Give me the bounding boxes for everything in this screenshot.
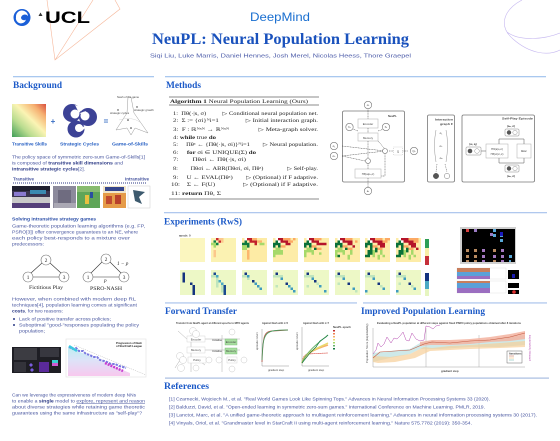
subheading: solving intransitive strategy games: Solving intransitive strategy games: [12, 216, 96, 222]
algorithm box: Algorithm 1 Neural Population Learning (Ours): [170, 98, 308, 105]
diagram: fictitious play: 1: [27, 275, 30, 281]
plus sign: +: [51, 117, 56, 126]
diagram: transfer from NeuPL agent: Memory: [191, 348, 202, 352]
diagram: transfer from NeuPL agent: [175, 321, 249, 372]
image: small game frames: [508, 270, 519, 294]
algorithm box: 5: Πθᶻ ← {Πθ(·|s, σi)}ᴺi=1 ▷ Neural population.: [173, 141, 318, 148]
diagram: self-play episode: Self-Play Episode: [502, 116, 534, 120]
heat maps: interaction graph row: [180, 270, 421, 295]
algorithm box: 6: for σi ∈ UNIQUE(Σ) do: [173, 149, 257, 156]
diagram: interaction graph: [428, 115, 454, 182]
diagram: self-play episode: Πθ(a|o,σ): [491, 147, 503, 151]
text: research question: guarantees using the same infrastructure as "self-play"?: [12, 410, 142, 416]
diagram: PSRO-Nash: [83, 254, 129, 292]
chart: against Nash with n=5: [255, 321, 289, 372]
heading: background: Background: [13, 81, 63, 91]
algorithm box: 4: while true do: [173, 135, 217, 141]
legend: NeuPL epoch: NeuPL epoch: [333, 325, 351, 329]
bullet list: reasons: [13, 316, 140, 334]
diagram: transfer from NeuPL agent: Encoder: [191, 338, 201, 342]
heat maps: payoff row: epoch: 0: [179, 234, 191, 238]
algorithm box: 9: U ← EVAL(Πθᶻ) ▷ (Optional) if F adaptive.: [173, 174, 318, 181]
arrow: transitive to intransitive: [13, 182, 147, 184]
diagram: PSRO-Nash: p: [103, 278, 107, 284]
reference list: [3] Lanctot, Marc, et al. "A unified game-theoretic approach to multiagent reinforcement learning." Advances in neural information processing systems 30 (2017).: [169, 412, 537, 418]
diagram: transfer from NeuPL agent: Transfer from NeuPL agent at different epochs to MPO agents: [176, 321, 249, 325]
color bar: interaction graph: [425, 273, 429, 296]
algorithm box: 2: Σ := {σi}ᴺi=1 ▷ Initial interaction graph.: [173, 118, 318, 124]
panel: background: [12, 76, 154, 416]
text: policy space: [12, 154, 145, 172]
diagram: transfer from NeuPL agent: Memory: [226, 349, 237, 353]
diagram: NeuPL architecture: Πθ(a|oₜ,σ): [362, 172, 374, 176]
equals sign: =: [104, 117, 109, 126]
legend: NeuPL epoch: [333, 325, 351, 350]
label: strategic cycles: Strategic Cycles: [60, 142, 99, 146]
image: grid world: [460, 227, 516, 264]
heat map: transitive skills: [12, 104, 46, 137]
diagram: fictitious play: 3: [63, 275, 66, 281]
text: research question: about diverse strategies while retaining game theoretic: [12, 404, 146, 410]
chart: stacked area bottom: [457, 281, 506, 293]
text: policy space: intransitive strategic cycles [2].: [12, 166, 85, 172]
diagram: NeuPL architecture: Qₛ: [412, 149, 416, 153]
color bar: payoff: [425, 239, 429, 265]
diagram: PSRO-Nash: PSRO-NASH: [90, 286, 122, 292]
reference list: [169, 396, 537, 426]
chart: against Nash with n=7: [295, 321, 329, 372]
text: population learning intro: [12, 224, 145, 248]
label: intransitive: Intransitive: [125, 176, 149, 182]
diagram: self-play episode: (aₗ, aⱼ): [469, 141, 477, 146]
panel: references: [164, 378, 549, 426]
diagram: self-play episode: Πθ(a'|o',σ): [491, 152, 503, 156]
diagram: fictitious play: Fictitious Play: [29, 285, 63, 291]
chart: evaluating NeuPL population: Population Score (Exploitability): [365, 323, 369, 363]
diagram: NeuPL architecture: Encoder: [363, 122, 373, 126]
diagram: transfer from NeuPL agent: Policy: [228, 358, 236, 362]
diagram: self-play episode: (aₙ, σ): [507, 124, 515, 128]
text: research question: [12, 392, 146, 416]
diagram: transfer from NeuPL agent: Encoder: [226, 340, 236, 344]
bullet list: reasons: population;: [19, 328, 45, 334]
heat maps: payoff row: [179, 234, 421, 262]
text: population learning intro: predecessors:: [12, 242, 44, 248]
diagram: self-play episode: (aₙ, σ): [507, 174, 515, 178]
text: population learning intro: Game-theoretic population learning algorithms (e.g. FP,: [12, 224, 145, 230]
diagram: PSRO-Nash: 2: [105, 257, 108, 263]
text: policy space: is composed of transitive skill dimensions and: [12, 160, 123, 166]
diagram: NeuPL architecture: [330, 101, 418, 195]
chart: evaluating NeuPL population: Iterations: [509, 352, 522, 356]
diagram: PSRO-Nash: 1 − p: [117, 261, 129, 267]
diagram: NeuPL architecture: σ₁: [333, 144, 335, 148]
chart: progression of Nash of StarCraft league: of StarCraft League: [116, 344, 142, 348]
diagram: interaction graph: graph Σ: [440, 122, 453, 126]
text: costs of deep RL: techniques[4], population learning comes at significant: [12, 302, 138, 308]
text: costs of deep RL: costs, for two reasons:: [12, 308, 63, 314]
logo: DeepMind emblem: [14, 9, 30, 26]
text: policy space: The policy space of symmetric zero-sum Game-of-Skills[1]: [12, 154, 145, 160]
diagram: transfer from NeuPL agent: Initialise: [212, 349, 223, 353]
text: population learning intro: PSRO[3]) offer convergence guarantees to an NE, where: [12, 230, 138, 236]
diagram: NeuPL architecture: Memory: [363, 136, 374, 140]
chart: progression of Nash of StarCraft league: Progression of Nash: [116, 341, 142, 345]
diagram: interaction graph: σ₁: [440, 131, 442, 135]
chart: progression of Nash of StarCraft league: [66, 339, 146, 377]
algorithm box: 10: Σ ← F(U) ▷ (Optional) if F adaptive.: [171, 181, 318, 188]
image: StarCraft agents: [12, 347, 61, 373]
chart: against Nash with n=7: episode return: [295, 332, 299, 350]
diagram: NeuPL architecture: σₜ: [367, 103, 369, 107]
chart: evaluating NeuPL population: [365, 321, 532, 373]
diagram: interaction graph: Interaction: [435, 118, 453, 122]
diagram: game of skills top: [110, 95, 154, 135]
text: research question: to enable a single model to explore, represent and reason: [12, 398, 145, 404]
bullet list: reasons: Suboptimal "good-"responses populating the policy: [19, 322, 140, 328]
decoration: orange geometric lines: [47, 0, 120, 60]
text: costs of deep RL: However, when combined with modern deep RL: [12, 296, 136, 302]
panel: experiments: [164, 212, 547, 296]
algorithm box: 11: return Πθ, Σ: [171, 191, 221, 197]
chart: against Nash with n=7: Against Nash with n=7: [303, 321, 329, 325]
reference list: [1] Czarnecki, Wojciech M., et al. "Real World Games Look Like Spinning Tops." Advances in Neural Information Processing Systems 33 (2020).: [169, 396, 490, 402]
diagram: PSRO-Nash: 1: [87, 275, 90, 281]
authors: Siqi Liu, Luke Marris, Daniel Hennes, Josh Merel, Nicolas Heess, Thore Graepel: [150, 54, 411, 60]
logo: UCL: UCL: [45, 9, 90, 27]
diagram: fictitious play: 2: [45, 258, 48, 264]
algorithm box: 3: F : ℝᴺˣᴺ → ℝᴺˣᴺ ▷ Meta-graph solver.: [173, 127, 318, 133]
chart: against Nash with n=7: gradient step: [308, 368, 325, 372]
chart: evaluating NeuPL population: Exploitability Reward: [528, 335, 532, 361]
chart: evaluating NeuPL population: Evaluating a NeuPL population at different steps against fixed PSRO policy populations obtained after 8 iterations: [377, 321, 521, 325]
reference list: [4] Vinyals, Oriol, et al. "Grandmaster level in StarCraft II using multi-agent reinforcement learning." Nature 575.7782 (2019): 350-354.: [169, 420, 472, 426]
chart: evaluating NeuPL population: gradient step: [441, 369, 459, 373]
algorithm box: [169, 97, 319, 199]
diagram: interaction graph: σₖ: [440, 144, 443, 148]
chart: stacked area top: [457, 268, 506, 279]
algorithm box: 7: Πθσi ← Πθ(·|s, σi): [173, 156, 246, 163]
chart: against Nash with n=5: episode return: [255, 332, 259, 350]
diagram: interaction graph: σₙ: [440, 156, 443, 160]
diagram: transfer from NeuPL agent: Policy: [193, 358, 201, 362]
diagram: NeuPL architecture: NeuPL: [388, 114, 397, 118]
label: transitive: Transitive: [13, 176, 34, 182]
logo: DeepMind wordmark: DeepMind: [250, 10, 310, 24]
chart: against Nash with n=5: Against Nash with n=5: [262, 321, 288, 325]
diagram: PSRO-Nash: 3: [123, 275, 126, 281]
icon: strategic cycles: [63, 104, 97, 138]
reference list: [2] Balduzzi, David, et al. "Open-ended learning in symmetric zero-sum games." International Conference on Machine Learning. PMLR, 2019.: [169, 404, 485, 410]
panel: methods: [165, 76, 546, 199]
algorithm box: 8: Πθσi ← ABR(Πθσi, σi, Πθᶻ) ▷ Self-play.: [173, 165, 318, 172]
diagram: NeuPL architecture: hₜ: [385, 125, 387, 129]
diagram: game of skills top: strategic cycles: [110, 111, 130, 115]
algorithm box: 1: Πθ(·|s, σ) ▷ Conditional neural population net.: [173, 110, 318, 117]
text: research question: Can we leverage the expressiveness of modern deep NNs: [12, 392, 137, 398]
bullet list: reasons: Lack of positive transfer across policies;: [19, 316, 111, 322]
label: transitive skills: Transitive Skills: [12, 142, 47, 146]
diagram: NeuPL architecture: σₖ: [333, 154, 336, 158]
panel: forward transfer: [165, 302, 357, 372]
heading: forward transfer: Forward Transfer: [165, 307, 238, 317]
diagram: transfer from NeuPL agent: Initialise: [212, 338, 223, 342]
diagram: self-play episode: [462, 115, 534, 182]
heading: experiments: Experiments (RwS): [164, 216, 242, 228]
diagram: NeuPL architecture: hₜ: [348, 125, 351, 129]
diagram: game of skills top: strategic growth: [134, 108, 154, 112]
diagram: self-play episode: Env: [521, 149, 527, 153]
label: game of skills: Game-of-Skills: [112, 142, 148, 146]
text: population learning intro: each policy best-responds to a mixture over: [12, 236, 130, 242]
diagram: NeuPL architecture: aₜ: [367, 189, 369, 193]
diagram: NeuPL architecture: Q: [397, 150, 400, 154]
image strip: game examples: [12, 186, 150, 208]
text: costs of deep RL: [12, 296, 138, 314]
heading: improved population learning: Improved Population Learning: [361, 307, 485, 317]
chart: against Nash with n=5: gradient step: [268, 368, 285, 372]
panel: improved population learning: [361, 302, 547, 373]
heading: references: References: [164, 382, 209, 392]
diagram: fictitious play: [23, 255, 69, 291]
heading: methods: Methods: [166, 81, 201, 91]
decoration: purple curves: [504, 0, 560, 53]
logo: UCL: [38, 9, 90, 27]
title: NeuPL: Neural Population Learning: [152, 31, 409, 48]
diagram: game of skills top: Nash of the game: [117, 95, 140, 99]
